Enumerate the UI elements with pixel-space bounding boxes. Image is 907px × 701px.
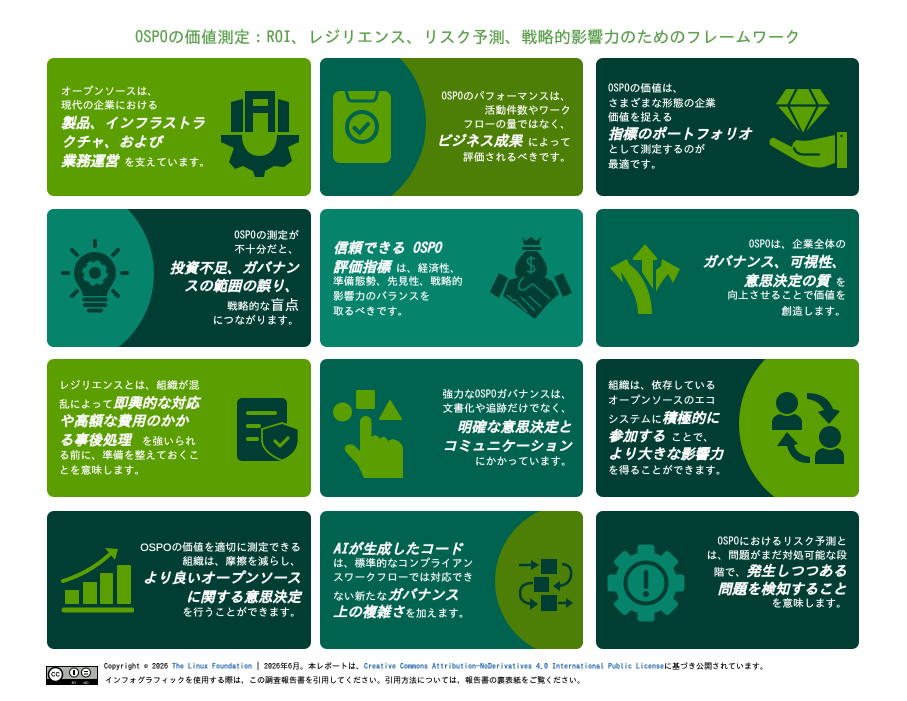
text block: スの範囲の誤り、: [184, 278, 299, 293]
icon: workflow: [519, 559, 573, 611]
text block: 影響力のバランスを: [333, 291, 430, 302]
icon: CC BY-ND license badge: ND: [83, 681, 89, 685]
text block: 評価指標 は、経済性、: [333, 259, 461, 274]
icon: branching arrows: [610, 244, 680, 314]
text block: コミュニケーション: [442, 438, 572, 453]
text block: 最適です。: [608, 159, 662, 170]
text block: [442, 388, 573, 467]
text block: OSPOのパフォーマンスは、: [441, 91, 571, 102]
text block: とを意味します。: [59, 465, 145, 476]
text block: 戦略的な盲点: [227, 297, 299, 312]
text block: 準備態勢、先見性、戦略的: [333, 276, 463, 287]
panel: portfolio of metrics: [596, 58, 859, 196]
text block: オープンソースのエコ: [608, 395, 716, 406]
text block: OSPOの測定が: [234, 230, 299, 241]
panel: trusted metrics: [320, 209, 583, 347]
text block: [436, 90, 571, 163]
panel: governance and visibility: [596, 209, 859, 347]
text block: OSPOの価値は、: [608, 83, 684, 94]
icon: document with shield: [237, 398, 298, 461]
text block: 指標のポートフォリオ: [608, 126, 752, 141]
text block: 評価されるべきです。: [463, 152, 571, 163]
panel: ecosystem participation: [596, 359, 859, 497]
text block: [169, 230, 300, 326]
icon: hand pointing at shapes: [333, 390, 403, 478]
text block: [702, 238, 846, 317]
text block: さまざまな形態の企業: [608, 98, 716, 109]
text block: [61, 85, 210, 168]
icon: money bag and handshake: [490, 237, 572, 319]
text block: は、問題がまだ対処可能な段: [707, 550, 847, 561]
text block: AIが生成したコード: [333, 541, 463, 556]
text block: 向上させることで価値を: [727, 290, 846, 301]
text block: [332, 541, 473, 619]
text block: る事後処理 を強いられ: [59, 432, 196, 447]
text block: として測定するのが: [608, 144, 705, 155]
text block: システムに積極的に: [608, 410, 720, 425]
text block: を行うことができます。: [182, 607, 301, 618]
panel: products and infrastructure: [47, 58, 311, 196]
panel: AI generated code: [320, 511, 583, 649]
text block: につながります。: [213, 315, 299, 326]
text block: 参加する ことで、: [608, 428, 714, 443]
panel: risk forecasting: [596, 511, 859, 649]
text block: OSPOの価値を適切に測定できる: [140, 542, 301, 554]
text block: 明確な意思決定と: [457, 419, 572, 434]
text block: より良いオープンソース: [143, 570, 301, 585]
text block: より大きな影響力: [608, 446, 723, 461]
text block: 取るべきです。: [333, 306, 409, 317]
text block: 価値を捉える: [608, 112, 673, 123]
text block: 文書化や追跡だけでなく、: [442, 403, 572, 414]
icon: CC BY-ND license badge: BY: [72, 681, 77, 685]
text block: クチャ、および: [61, 134, 162, 149]
text block: 不十分だと、: [234, 244, 299, 255]
text block: スワークフローでは対応でき: [333, 572, 473, 583]
panel: performance: [320, 58, 583, 196]
icon: growth bar chart: [61, 548, 134, 612]
text block: 創造します。: [781, 306, 846, 317]
icon: CC BY-ND license badge: CC: [51, 672, 60, 678]
text block: ビジネス成果 によって: [436, 133, 571, 148]
citation line: インフォグラフィックを使用する際は、この調査報告書を引用してください。引用方法については、報告書の裏表紙をご覧ください。: [105, 676, 585, 684]
text block: [333, 240, 463, 317]
panel: resilience: [47, 359, 311, 497]
text block: にかかっています。: [475, 456, 572, 467]
text block: を得ることができます。: [608, 465, 727, 476]
text block: に関する意思決定: [186, 589, 301, 604]
text block: 現代の企業における: [61, 100, 158, 111]
text block: レジリエンスとは、組織が混: [59, 380, 199, 391]
icon: people exchange: [772, 392, 844, 464]
title: OSPOの価値測定：ROI、レジリエンス、リスク予測、戦略的影響力のためのフレームワーク: [135, 29, 801, 45]
text block: ガバナンス、可視性、: [702, 254, 846, 269]
text block: [608, 380, 727, 476]
text block: ない新たなガバナンス: [333, 587, 459, 602]
text block: 意思決定の質 を: [743, 273, 846, 288]
text block: 信頼できる OSPO: [333, 240, 441, 255]
text block: 製品、インフラストラ: [61, 115, 205, 130]
text block: [608, 82, 753, 170]
text block: フローの量ではなく、: [463, 119, 571, 130]
panel: strong governance: [320, 359, 583, 497]
icon: light bulb with gear: [61, 239, 129, 312]
panel: insufficient measurement: [47, 209, 311, 347]
icon: AI gear: [221, 91, 299, 177]
icon: gear with warning: [608, 544, 684, 622]
icon: clipboard: [333, 91, 391, 163]
copyright line: Copyright © 2026 The Linux Foundation | 2026年6月。本レポートは、Creative Commons Attribution-NoDerivatives 4.0 International Public Licenseに基づき公開されています。: [104, 662, 768, 670]
icon: diamond in hand: [769, 89, 847, 168]
text block: 組織は、摩擦を減らし、: [182, 556, 301, 567]
panel: better decisions: [47, 511, 311, 649]
text block: 組織は、依存している: [608, 380, 716, 391]
text block: OSPOにおけるリスク予測と: [717, 536, 847, 547]
text block: を意味します。: [771, 598, 847, 609]
text block: 乱によって即興的な対応: [59, 395, 199, 410]
text block: オープンソースは、: [61, 86, 158, 97]
text block: 強力なOSPOガバナンスは、: [442, 389, 572, 400]
text block: [59, 380, 202, 476]
text block: 上の複雑さを加えます。: [333, 604, 470, 619]
text block: 階で、発生しつつある: [714, 563, 847, 578]
text block: OSPOは、企業全体の: [749, 239, 846, 250]
text block: や高額な費用のかか: [59, 413, 189, 428]
text block: 投資不足、ガバナン: [169, 260, 299, 275]
text block: 業務運営 を支えています。: [61, 153, 210, 168]
text block: 活動件数やワーク: [485, 105, 571, 116]
text block: る前に、準備を整えておくこ: [59, 450, 199, 461]
icon: CC BY-ND license badge: [46, 666, 98, 685]
text block: 問題を検知すること: [717, 581, 847, 596]
text block: [707, 536, 847, 609]
text block: は、標準的なコンプライアン: [333, 558, 473, 569]
text block: [140, 542, 303, 618]
